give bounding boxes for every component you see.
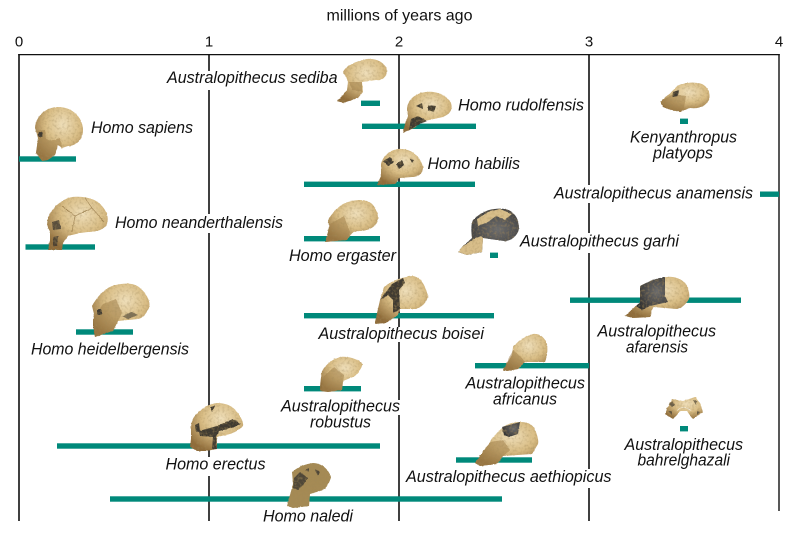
axis tick labels: 3 xyxy=(585,34,593,50)
axis tick labels: 0 xyxy=(15,34,23,50)
label: Australopithecus bahrelghazali xyxy=(624,436,743,470)
skull: Australopithecus africanus xyxy=(503,334,547,371)
skull: Homo naledi xyxy=(287,463,331,508)
label: Homo rudolfensis: Homo rudolfensis xyxy=(458,96,584,114)
skull: Homo neanderthalensis xyxy=(47,197,108,250)
label: Homo neanderthalensis: Homo neanderthalensis xyxy=(115,214,283,232)
skull: Homo heidelbergensis xyxy=(92,284,150,337)
label: Kenyanthropus platyops xyxy=(630,129,737,162)
label: Australopithecus robustus: robustus xyxy=(310,413,371,431)
skull: Kenyanthropus platyops xyxy=(660,83,710,112)
label: Homo erectus: Homo erectus xyxy=(166,455,266,473)
skull: Homo rudolfensis xyxy=(403,92,452,133)
axis title: millions of years ago xyxy=(326,8,473,25)
skull: Australopithecus garhi xyxy=(458,209,519,255)
label: Australopithecus aethiopicus: Australopithecus aethiopicus xyxy=(405,468,612,486)
label: Australopithecus africanus: Australopithecus xyxy=(465,375,585,393)
skull: Homo habilis xyxy=(377,149,423,185)
label: Australopithecus sediba: Australopithecus sediba xyxy=(166,69,338,87)
skull: Australopithecus afarensis xyxy=(625,277,689,318)
label: Australopithecus afarensis: afarensis xyxy=(626,338,688,356)
skull: Homo sapiens xyxy=(35,107,83,161)
label: Australopithecus africanus: africanus xyxy=(493,390,557,408)
label: Australopithecus anamensis: Australopithecus anamensis xyxy=(553,185,753,203)
label: Homo naledi: Homo naledi xyxy=(263,508,353,526)
label: Australopithecus robustus: Australopithecus xyxy=(280,398,400,416)
skull: Homo erectus xyxy=(190,403,243,451)
skull: Australopithecus bahrelghazali xyxy=(665,397,703,419)
axis tick labels: 2 xyxy=(395,34,403,50)
label: Australopithecus bahrelghazali: Australopithecus xyxy=(624,436,743,454)
label: Kenyanthropus platyops: Kenyanthropus xyxy=(630,129,737,147)
skull: Australopithecus boisei xyxy=(375,276,428,324)
skull: Homo ergaster xyxy=(325,200,378,242)
label: Homo habilis: Homo habilis xyxy=(428,155,520,173)
label: Australopithecus garhi: Australopithecus garhi xyxy=(519,233,679,251)
label: Homo ergaster: Homo ergaster xyxy=(289,247,397,265)
label: Australopithecus afarensis xyxy=(597,323,716,356)
skull: Australopithecus robustus xyxy=(320,357,363,392)
axis tick labels: 1 xyxy=(205,34,213,50)
label: Australopithecus africanus xyxy=(465,375,585,408)
label: Australopithecus boisei: Australopithecus boisei xyxy=(318,325,484,343)
axis tick labels: 4 xyxy=(775,34,783,50)
label knockouts on grid lines xyxy=(205,71,593,488)
label: Homo heidelbergensis: Homo heidelbergensis xyxy=(31,341,189,359)
range bars xyxy=(19,101,779,502)
axis tick labels xyxy=(15,34,783,50)
label: Australopithecus robustus xyxy=(280,398,400,431)
label: Australopithecus afarensis: Australopithecus xyxy=(597,323,716,341)
label: Australopithecus bahrelghazali: bahrelghazali xyxy=(638,452,730,470)
skull: Australopithecus aethiopicus xyxy=(475,422,538,466)
label: Homo sapiens: Homo sapiens xyxy=(91,119,193,137)
label: Kenyanthropus platyops: platyops xyxy=(652,144,713,162)
skull: Australopithecus sediba xyxy=(337,59,387,103)
